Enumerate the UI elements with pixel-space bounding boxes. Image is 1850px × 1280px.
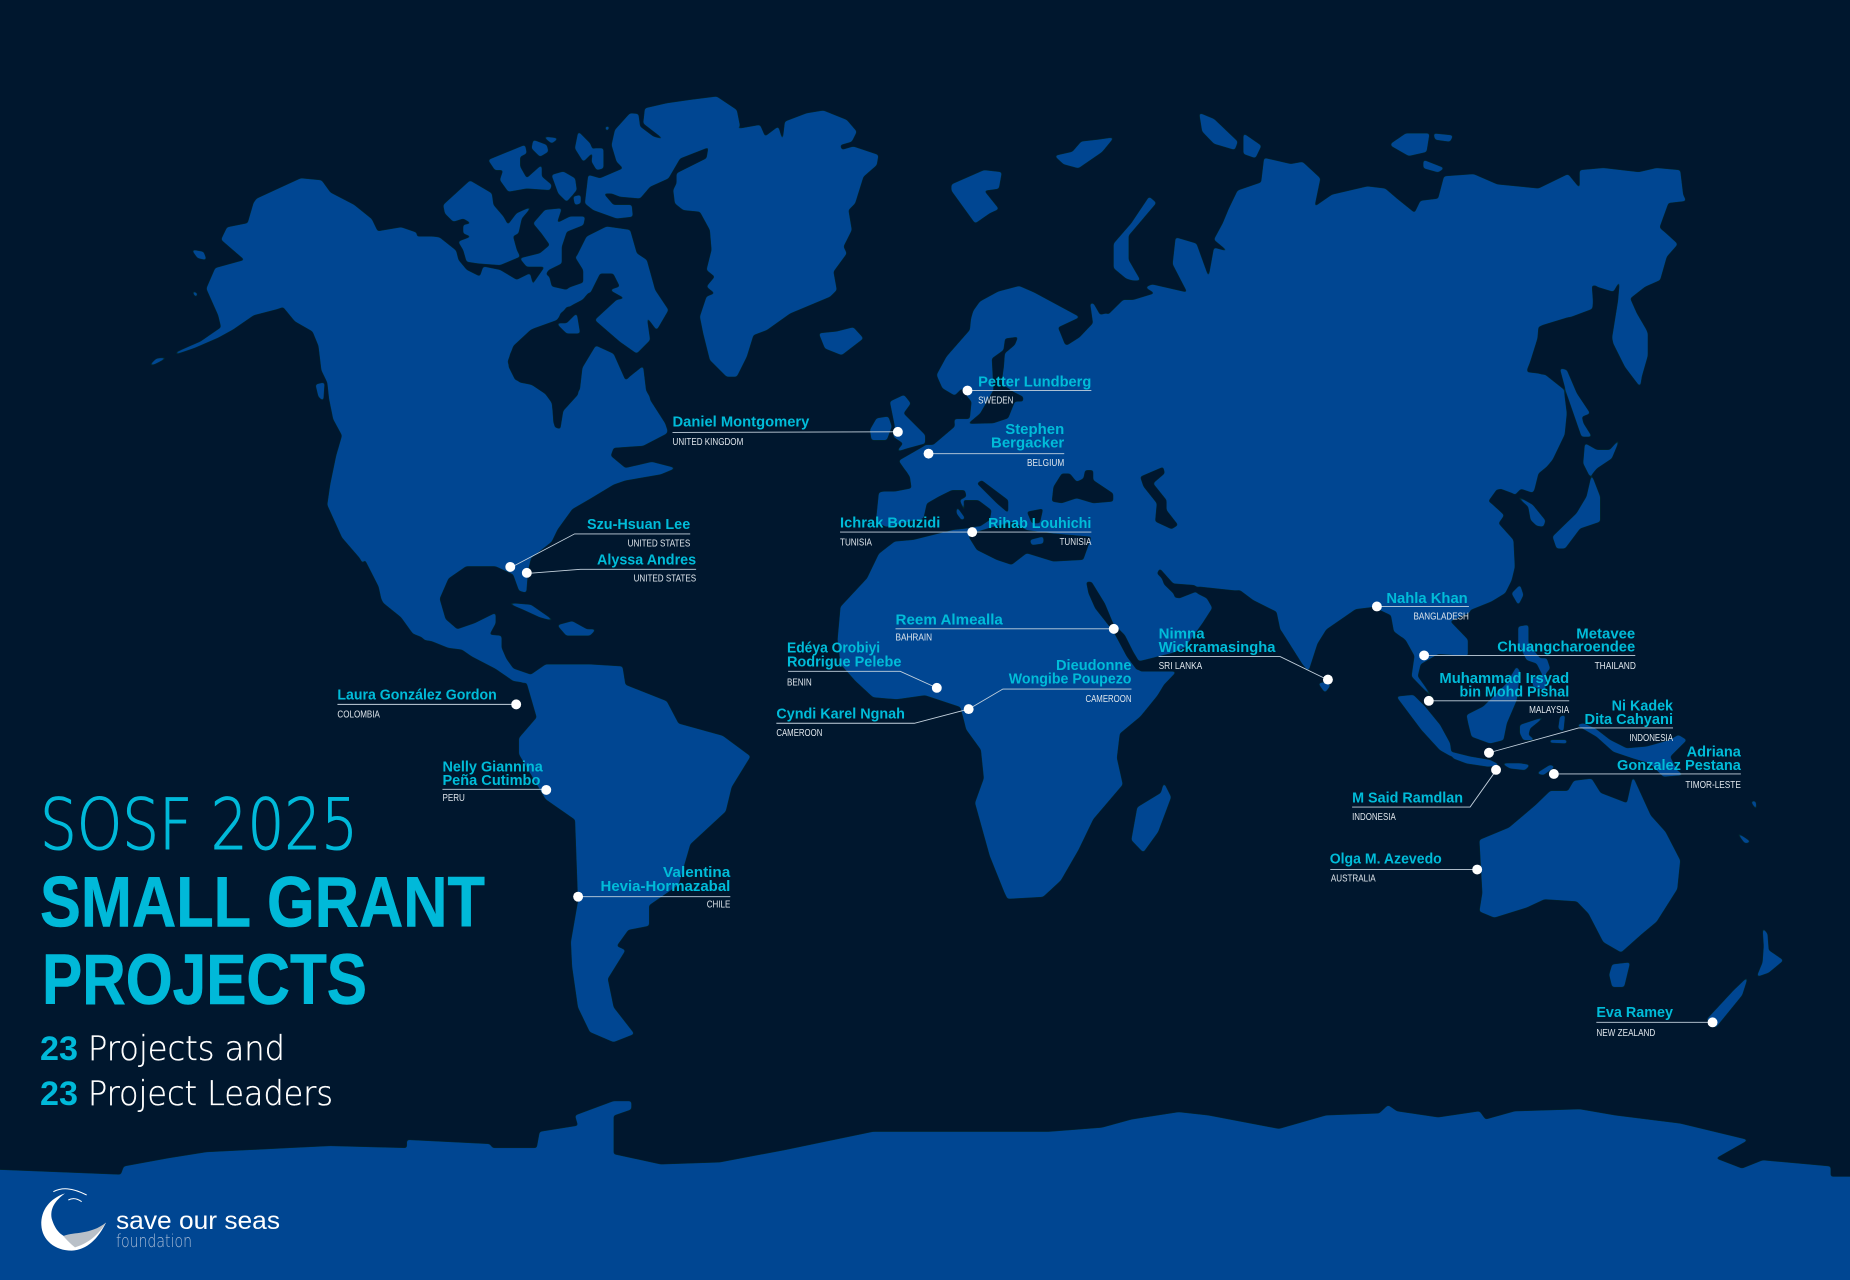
Caspian Sea xyxy=(1140,467,1178,529)
label: Metavee Chuangcharoendee xyxy=(1419,626,1636,672)
Western Mediterranean xyxy=(870,490,977,542)
map: Eurasia and Africa xyxy=(838,113,1686,899)
New Zealand xyxy=(1707,928,1783,1028)
Gulf of California xyxy=(363,559,382,603)
map: Europe detail xyxy=(870,267,1178,565)
label: Reem Almealla xyxy=(896,613,1119,644)
Baltic Sea xyxy=(962,337,1023,424)
Eastern Mediterranean xyxy=(968,522,1092,565)
Australia xyxy=(1480,777,1680,952)
Red Sea xyxy=(1086,582,1145,670)
label: Szu-Hsuan Lee: UNITED STATES xyxy=(628,538,691,549)
label: Valentina Hevia-Hormazabal: CHILE xyxy=(707,899,731,910)
Pacific islands xyxy=(1736,801,1757,843)
label: Laura González Gordon: COLOMBIA xyxy=(337,709,380,720)
North America xyxy=(175,178,675,684)
label: Muhammad Irsyad bin Mohd Pishal: Muhammad Irsyad xyxy=(1439,671,1569,687)
label: Nimna Wickramasingha xyxy=(1159,626,1333,685)
map: South America and Central America xyxy=(413,628,750,1042)
subtitle line 1: Projects and xyxy=(88,1029,285,1069)
map: Indian Ocean coast detail xyxy=(1086,568,1428,743)
label: Nelly Giannina Peña Cutimbo: PERU xyxy=(442,793,465,804)
label: Adriana Gonzalez Pestana: TIMOR-LESTE xyxy=(1685,780,1741,791)
label: Nahla Khan: Nahla Khan xyxy=(1386,591,1468,607)
label: Dieudonne Wongibe Poupezo: CAMEROON xyxy=(1085,694,1131,705)
Philippines xyxy=(1518,625,1550,690)
label: Edéya Orobiyi Rodrigue Pelebe xyxy=(787,640,942,693)
label: Dieudonne Wongibe Poupezo: Dieudonne xyxy=(1056,658,1131,674)
Banks and Victoria islands xyxy=(443,181,532,265)
label: Adriana Gonzalez Pestana: Gonzalez Pestana xyxy=(1617,758,1742,774)
title block xyxy=(40,784,485,1114)
label: Nelly Giannina Peña Cutimbo: Peña Cutimbo xyxy=(442,773,540,789)
label: Nimna Wickramasingha: Wickramasingha xyxy=(1159,640,1276,656)
project leader labels xyxy=(337,374,1742,1039)
label: M Said Ramdlan: INDONESIA xyxy=(1352,812,1396,823)
icon: wave crescent xyxy=(41,1189,106,1251)
map: Canadian Arctic and Greenland xyxy=(417,87,883,433)
label: Rihab Louhichi xyxy=(967,516,1092,548)
label: Alyssa Andres: UNITED STATES xyxy=(634,574,696,585)
Sri Lanka xyxy=(1318,682,1330,693)
label: Eva Ramey: Eva Ramey xyxy=(1596,1005,1674,1021)
label: M Said Ramdlan xyxy=(1352,765,1501,823)
Borneo xyxy=(1467,667,1520,743)
label: Muhammad Irsyad bin Mohd Pishal xyxy=(1424,671,1570,716)
label: Dieudonne Wongibe Poupezo: Wongibe Poupezo xyxy=(1009,672,1131,688)
label: Stephen Bergacker xyxy=(924,422,1064,469)
Arctic Russian islands xyxy=(952,113,1453,280)
label: Adriana Gonzalez Pestana: Adriana xyxy=(1687,744,1742,760)
label: Ichrak Bouzidi: TUNISIA xyxy=(840,538,872,549)
label: Daniel Montgomery: UNITED KINGDOM xyxy=(673,437,743,448)
New Guinea xyxy=(1577,723,1687,777)
Greenland xyxy=(673,111,878,377)
label: Ichrak Bouzidi: Ichrak Bouzidi xyxy=(840,515,940,531)
Aleutian tail and small islands xyxy=(149,250,324,401)
label: Nelly Giannina Peña Cutimbo: Nelly Giannina xyxy=(442,760,543,776)
Southampton Island xyxy=(557,313,580,333)
label: Cyndi Karel Ngnah: Cyndi Karel Ngnah xyxy=(776,707,905,723)
label: Edéya Orobiyi Rodrigue Pelebe: Rodrigue Pelebe xyxy=(787,655,901,671)
map: Oceania and Madagascar xyxy=(1131,777,1783,1028)
label: Metavee Chuangcharoendee: THAILAND xyxy=(1595,661,1636,672)
label: Nimna Wickramasingha: SRI LANKA xyxy=(1159,661,1203,672)
label: Stephen Bergacker: Stephen xyxy=(1005,422,1064,438)
Queen Elizabeth Islands xyxy=(488,127,610,205)
Somerset and Prince of Wales xyxy=(520,208,585,287)
Madagascar xyxy=(1131,783,1171,852)
label: Reem Almealla: BAHRAIN xyxy=(896,633,932,644)
map: Southeast Asia islands xyxy=(1397,625,1687,777)
Baffin Island xyxy=(575,227,668,353)
subtitle line 2: Project Leaders xyxy=(88,1074,333,1114)
label: Stephen Bergacker: Bergacker xyxy=(991,436,1064,452)
label: Szu-Hsuan Lee xyxy=(505,517,691,572)
subtitle line 1: 23 xyxy=(40,1030,78,1068)
label: M Said Ramdlan: M Said Ramdlan xyxy=(1352,790,1463,806)
Sulawesi and Maluku xyxy=(1520,715,1567,743)
Arctic Ocean and Hudson Bay xyxy=(417,87,883,433)
label: Rihab Louhichi: TUNISIA xyxy=(1060,537,1092,548)
label: Ichrak Bouzidi xyxy=(840,515,972,549)
Tasmania xyxy=(1609,962,1630,987)
label: Stephen Bergacker: BELGIUM xyxy=(1027,458,1064,469)
North Sea and Norwegian Sea xyxy=(877,267,1155,492)
label: Nahla Khan: BANGLADESH xyxy=(1413,611,1469,622)
Tyrrhenian Sea xyxy=(963,500,992,527)
title: SOSF 2025: SOSF 2025 xyxy=(40,784,358,866)
British Isles xyxy=(870,395,925,452)
Aegean Sea xyxy=(1027,508,1043,523)
label: Edéya Orobiyi Rodrigue Pelebe: Edéya Orobiyi xyxy=(787,640,880,656)
Black Sea xyxy=(1052,470,1113,503)
label: Valentina Hevia-Hormazabal: Valentina xyxy=(663,865,731,881)
label: Petter Lundberg xyxy=(963,374,1091,407)
Iceland xyxy=(819,327,863,355)
subtitle line 2: 23 xyxy=(40,1075,78,1113)
label: Olga M. Azevedo xyxy=(1330,852,1482,884)
label: Metavee Chuangcharoendee: Metavee xyxy=(1576,626,1635,642)
label: Metavee Chuangcharoendee: Chuangcharoendee xyxy=(1497,639,1635,655)
label: Laura González Gordon xyxy=(337,688,521,720)
label: Ni Kadek Dita Cahyani xyxy=(1484,698,1674,758)
label: Cyndi Karel Ngnah: CAMEROON xyxy=(776,728,822,739)
label: Ni Kadek Dita Cahyani: INDONESIA xyxy=(1629,733,1673,744)
label: Valentina Hevia-Hormazabal xyxy=(573,865,731,910)
title: PROJECTS: PROJECTS xyxy=(42,941,367,1020)
Ellesmere and Devon xyxy=(585,97,740,218)
label: Olga M. Azevedo: Olga M. Azevedo xyxy=(1330,852,1442,868)
label: Alyssa Andres: Alyssa Andres xyxy=(597,553,696,569)
label: Szu-Hsuan Lee: Szu-Hsuan Lee xyxy=(587,517,690,533)
label: Valentina Hevia-Hormazabal: Hevia-Hormazabal xyxy=(601,879,730,895)
Indian Ocean and Gulf of Aden xyxy=(1118,568,1428,743)
Adriatic Sea xyxy=(977,480,1008,513)
label: Laura González Gordon: Laura González Gordon xyxy=(337,688,497,704)
Sumatra xyxy=(1397,695,1452,757)
label: Rihab Louhichi: Rihab Louhichi xyxy=(988,516,1091,532)
Sakhalin xyxy=(1560,368,1592,437)
label: Daniel Montgomery xyxy=(673,415,903,448)
tagline: foundation xyxy=(116,1231,192,1252)
Taiwan xyxy=(1512,585,1523,605)
Caribbean islands xyxy=(507,603,596,636)
label: Petter Lundberg: SWEDEN xyxy=(978,396,1013,407)
label: Daniel Montgomery: Daniel Montgomery xyxy=(673,415,810,431)
Java and Lesser Sunda xyxy=(1450,752,1555,775)
label: Nahla Khan xyxy=(1372,591,1469,622)
label: Reem Almealla: Reem Almealla xyxy=(896,613,1004,629)
Mediterranean islands xyxy=(957,507,1043,545)
title: SMALL GRANT: SMALL GRANT xyxy=(40,864,485,942)
map: East Asia coast detail xyxy=(1470,217,1703,623)
wordmark: save our seas xyxy=(116,1207,280,1235)
Hokkaido xyxy=(1583,438,1620,477)
label: Alyssa Andres xyxy=(522,553,696,585)
label: Adriana Gonzalez Pestana xyxy=(1549,744,1742,791)
label: Nelly Giannina Peña Cutimbo xyxy=(442,760,551,804)
label: Eva Ramey xyxy=(1596,1005,1718,1039)
label: Dieudonne Wongibe Poupezo xyxy=(964,658,1131,714)
Pacific, Okhotsk and Sea of Japan xyxy=(1470,217,1703,623)
Honshu xyxy=(1553,475,1600,548)
label: Edéya Orobiyi Rodrigue Pelebe: BENIN xyxy=(787,677,812,688)
logo: Save Our Seas Foundation xyxy=(41,1189,280,1252)
label: Muhammad Irsyad bin Mohd Pishal: MALAYSIA xyxy=(1529,705,1570,716)
label: Olga M. Azevedo: AUSTRALIA xyxy=(1331,873,1376,884)
label: Petter Lundberg: Petter Lundberg xyxy=(978,374,1091,390)
label: Muhammad Irsyad bin Mohd Pishal: bin Mohd Pishal xyxy=(1459,685,1569,701)
label: Nimna Wickramasingha: Nimna xyxy=(1159,626,1205,642)
label: Cyndi Karel Ngnah xyxy=(776,707,969,739)
label: Eva Ramey: NEW ZEALAND xyxy=(1596,1028,1655,1039)
map: North America mainland and Caribbean xyxy=(149,178,675,684)
label: Ni Kadek Dita Cahyani: Dita Cahyani xyxy=(1585,712,1673,728)
map: Antarctica xyxy=(0,1101,1850,1280)
Eurasia and Africa landmass xyxy=(838,158,1686,899)
label: Ni Kadek Dita Cahyani: Ni Kadek xyxy=(1612,698,1674,714)
